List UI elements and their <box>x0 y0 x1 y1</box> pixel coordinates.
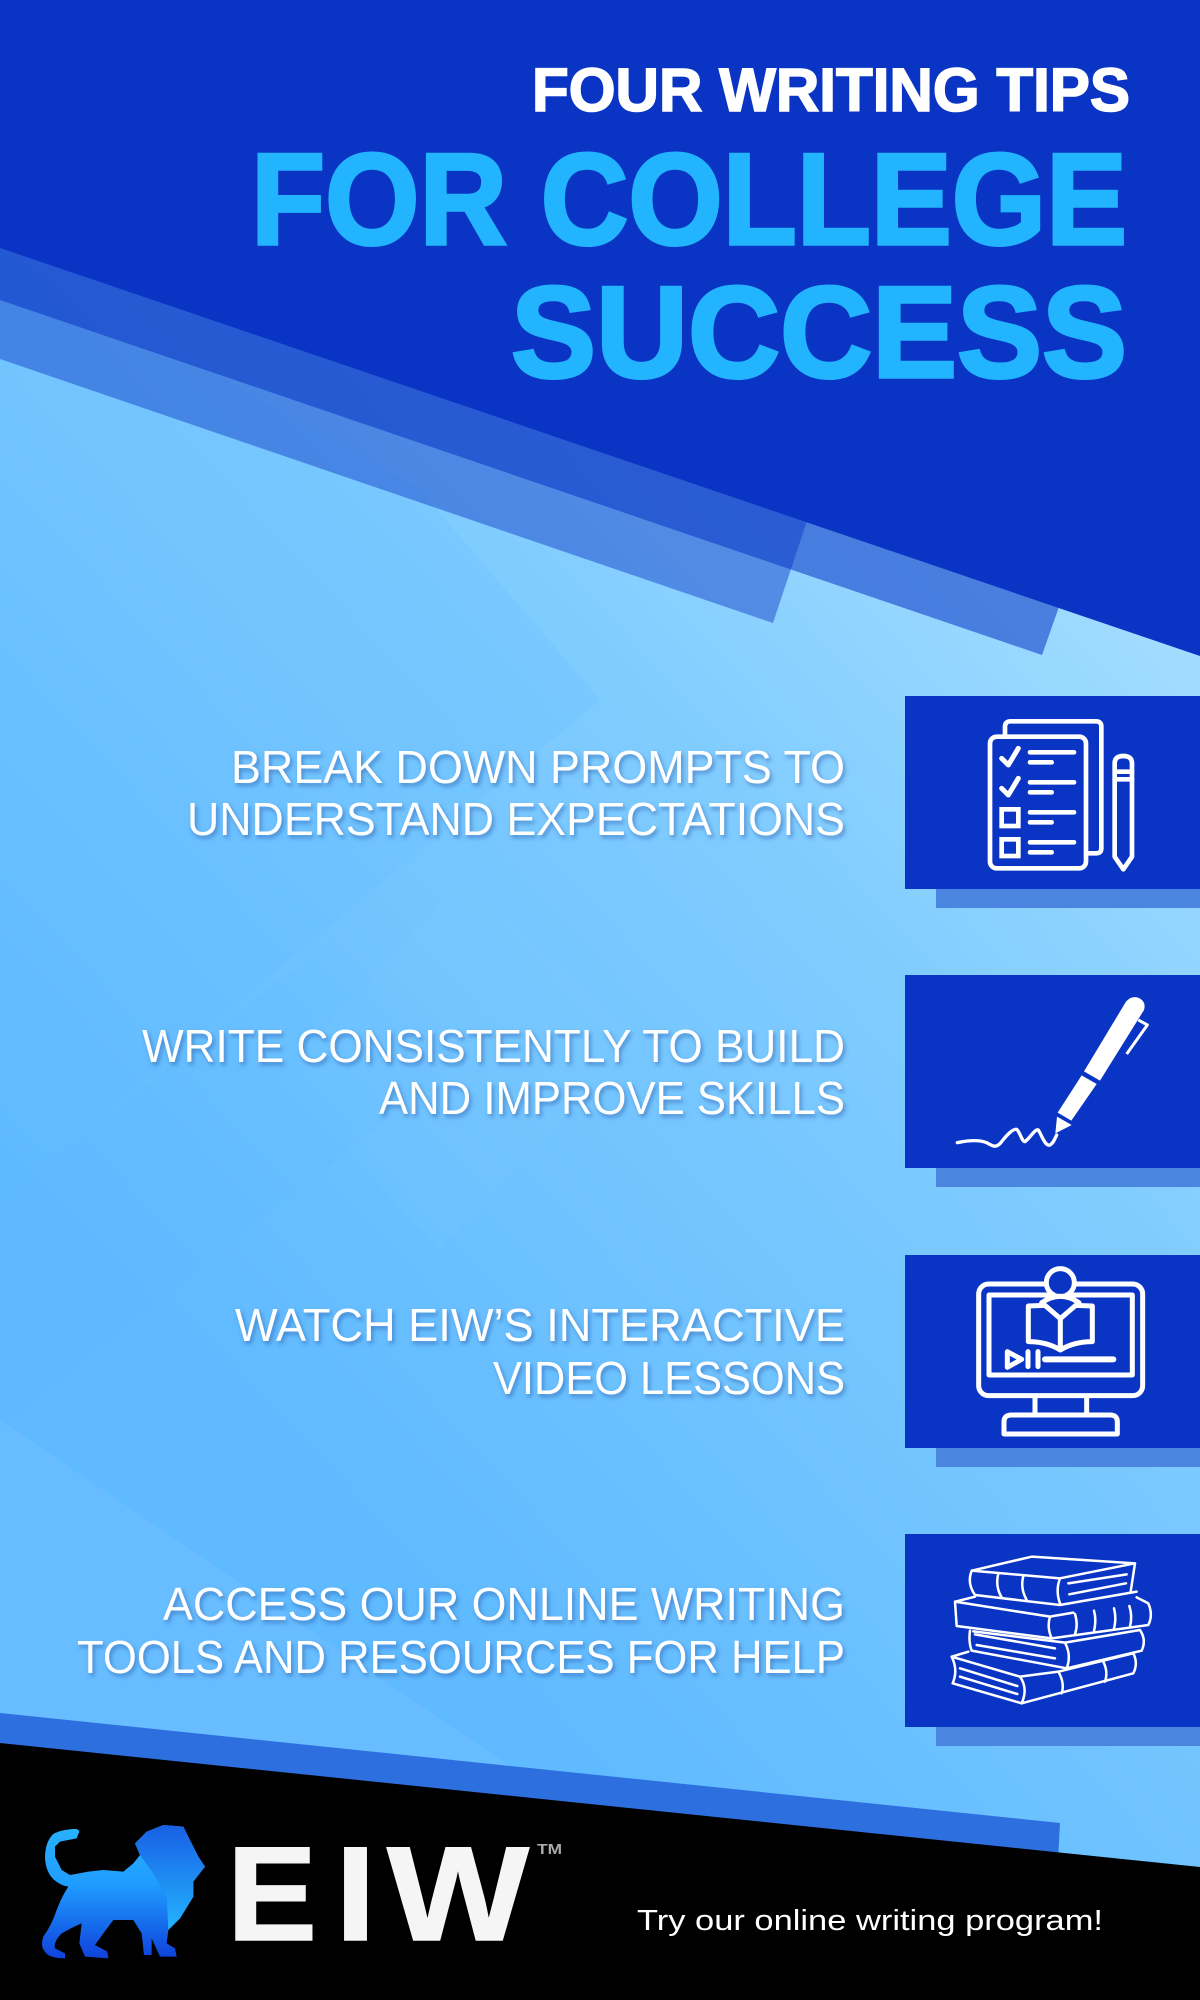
title: four writing tips: FOUR WRITING TIPS <box>532 56 1130 124</box>
tip 3 text: VIDEO LESSONS <box>493 1352 845 1404</box>
decorative band: upper diagonal <box>0 238 1061 655</box>
footer accent band <box>0 1713 1060 1860</box>
logo: lion <box>42 1825 205 1958</box>
tip 1 icon box <box>905 696 1200 908</box>
title: for college: FOR COLLEGE <box>251 126 1127 272</box>
logo: EIW wordmark: E <box>227 1820 317 1969</box>
tip 1 text: BREAK DOWN PROMPTS TO <box>231 741 845 793</box>
tip 2 text: WRITE CONSISTENTLY TO BUILD <box>142 1020 845 1072</box>
tip 2 icon box <box>905 975 1200 1187</box>
logo: EIW wordmark: I <box>335 1820 376 1969</box>
logo: EIW wordmark: W <box>387 1820 530 1969</box>
decorative band: lower diagonal <box>0 238 809 623</box>
call to action: Try our online writing program! <box>637 1905 1103 1937</box>
icon: video lesson monitor <box>979 1269 1143 1434</box>
tip 4 text: TOOLS AND RESOURCES FOR HELP <box>77 1631 845 1683</box>
logo: EIW wordmark <box>227 1820 562 1969</box>
icon: checklist and pencil <box>990 721 1132 869</box>
logo: EIW wordmark: TM <box>537 1841 562 1858</box>
icon: pen signature <box>957 997 1147 1146</box>
footer panel <box>0 1743 1200 2000</box>
tip 2 text: AND IMPROVE SKILLS <box>379 1072 845 1124</box>
tip 3 text <box>235 1299 845 1404</box>
title: success: SUCCESS <box>511 259 1127 405</box>
tip 4 text: ACCESS OUR ONLINE WRITING <box>163 1578 845 1630</box>
tip 3 text: WATCH EIW’S INTERACTIVE <box>235 1299 845 1351</box>
tip 1 text <box>187 741 845 845</box>
icon: stack of books <box>952 1557 1151 1703</box>
tip 1 text: UNDERSTAND EXPECTATIONS <box>187 793 845 845</box>
tip 4 text <box>77 1578 845 1683</box>
tip 2 text <box>142 1020 845 1124</box>
header panel <box>0 0 1200 656</box>
tip 3 icon box <box>905 1255 1200 1467</box>
tip 4 icon box <box>905 1534 1200 1746</box>
